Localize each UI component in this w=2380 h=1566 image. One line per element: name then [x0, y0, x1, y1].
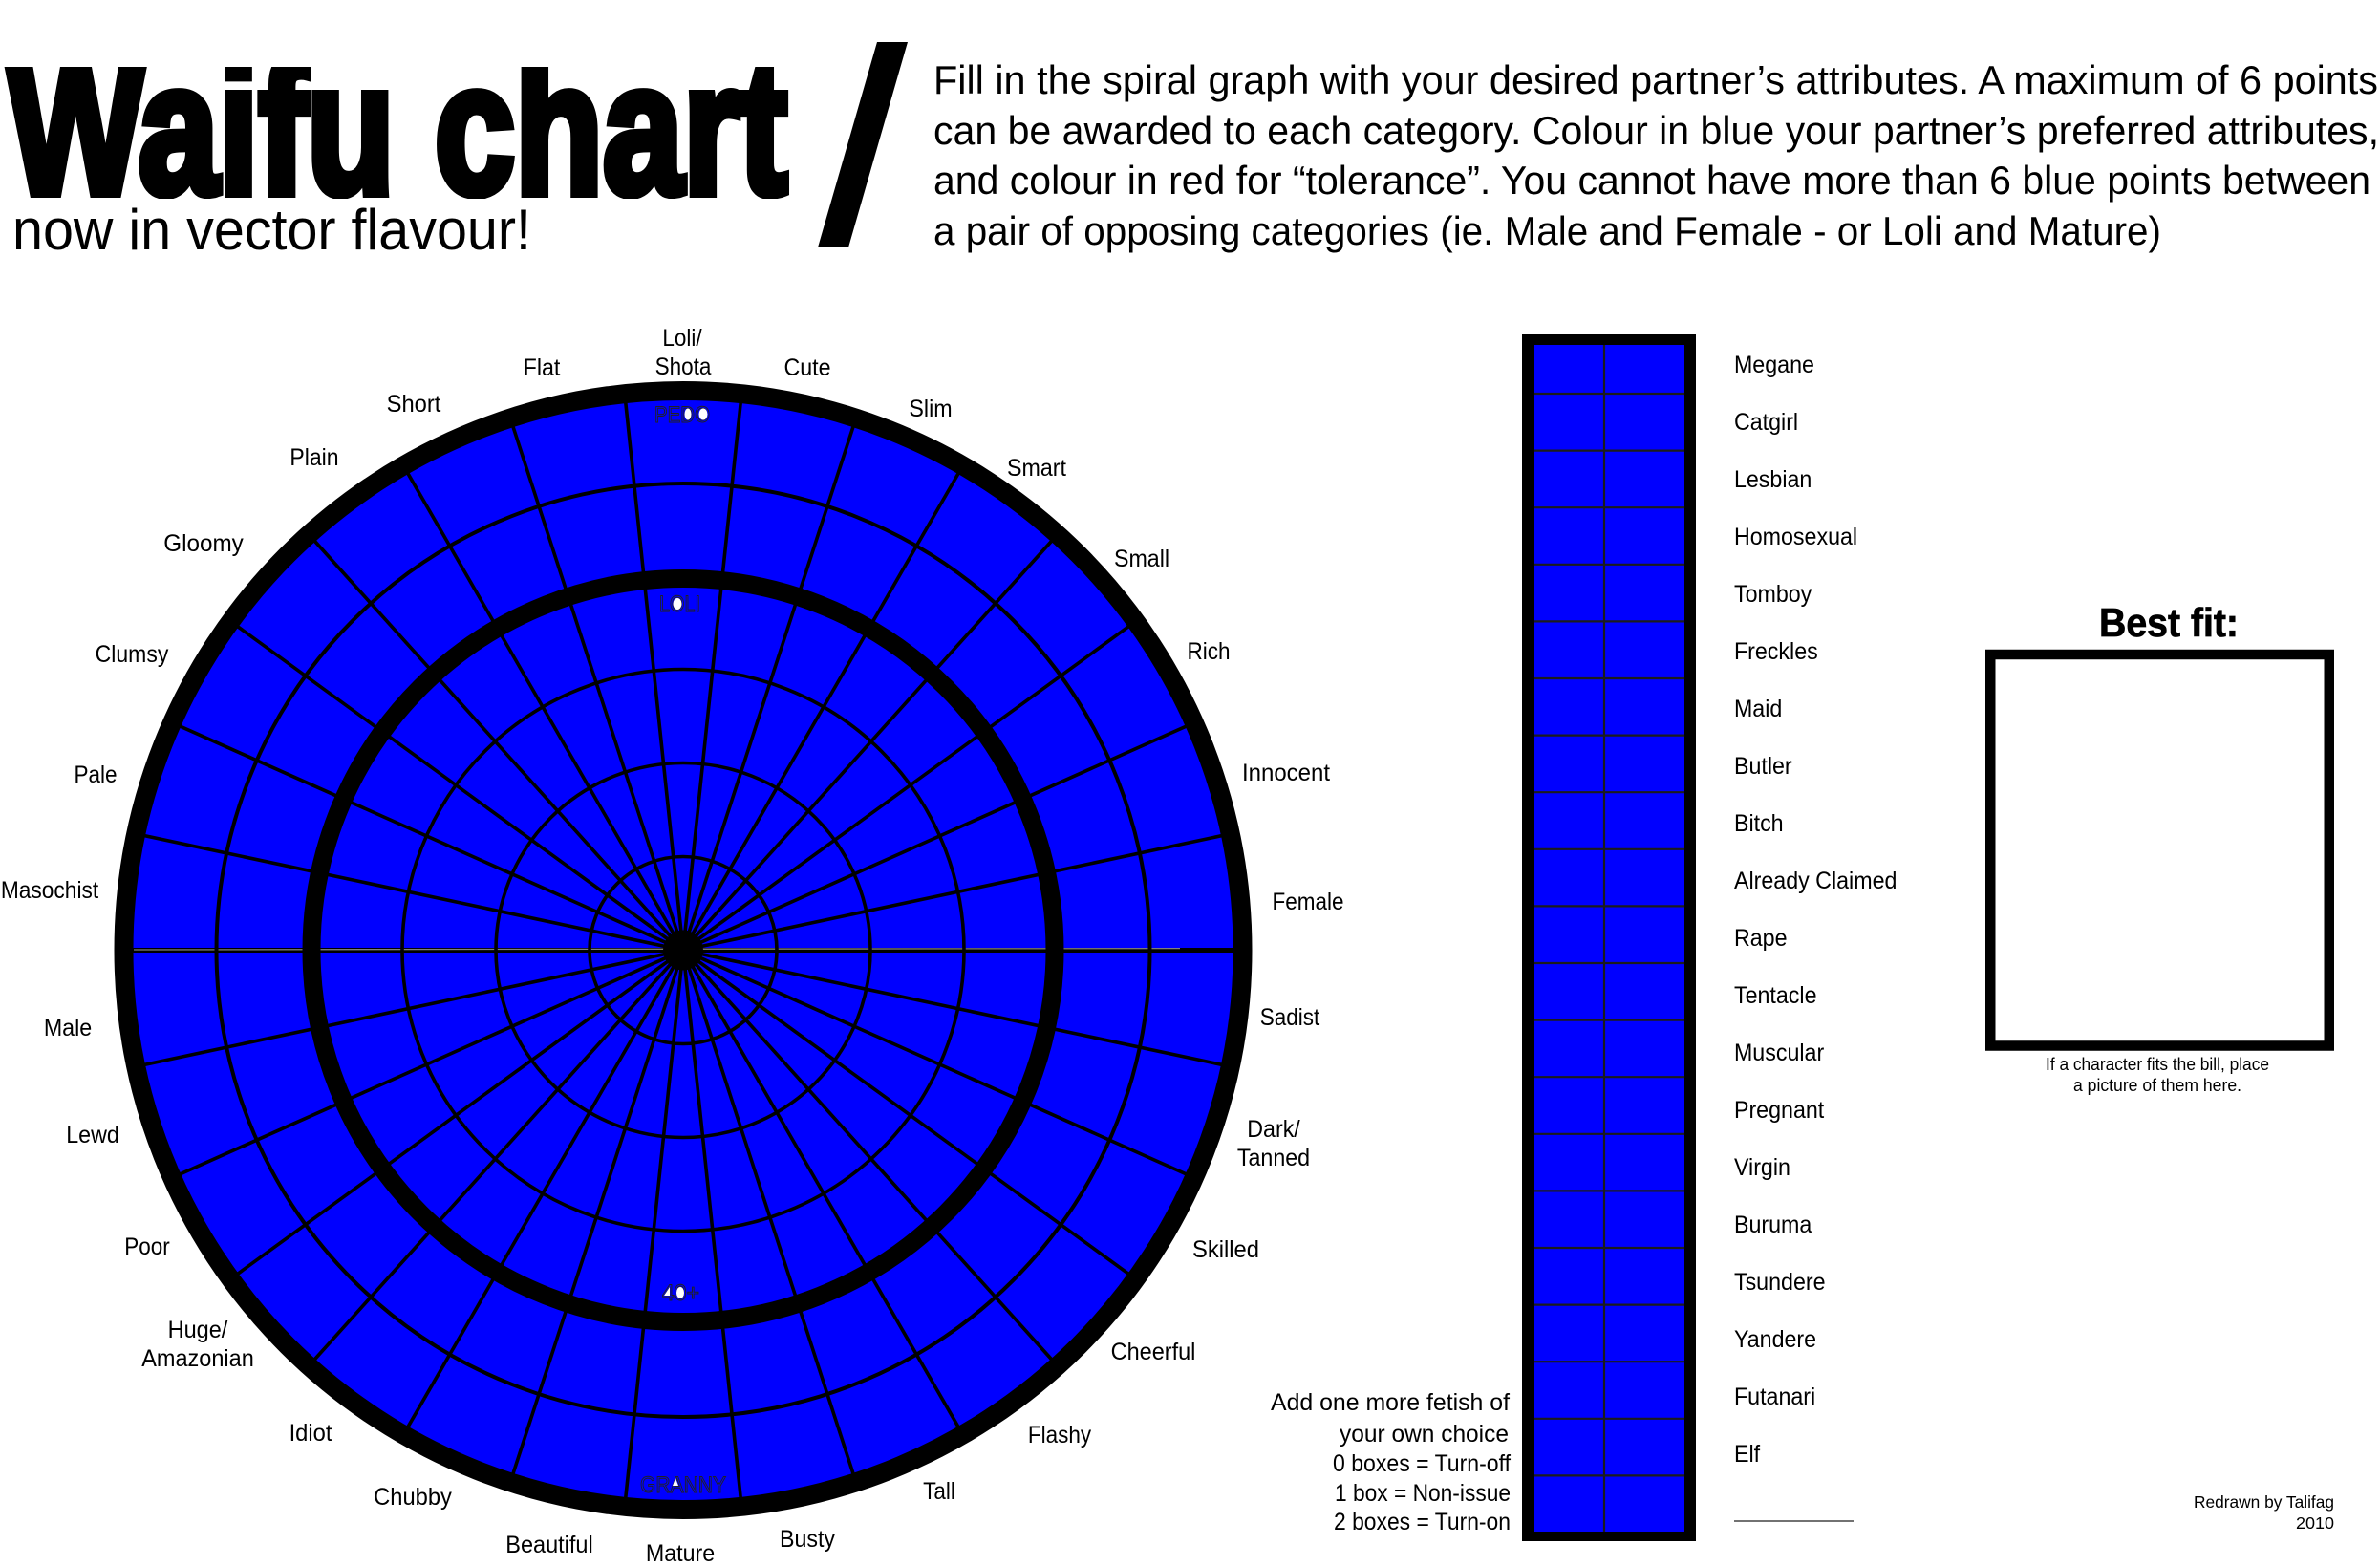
label: Rich: Rich — [1188, 638, 1230, 665]
instructions text block: a pair of opposing categories (ie. Male and Female - or Loli and Mature) — [933, 208, 2161, 253]
fetish label: Futanari: Futanari — [1734, 1384, 1815, 1410]
label: Cute: Cute — [783, 354, 831, 381]
label: Idiot: Idiot — [289, 1420, 332, 1447]
label: Huge/Amazonian — [141, 1317, 254, 1372]
label: Tall: Tall — [923, 1478, 955, 1505]
label: Busty: Busty — [780, 1526, 836, 1553]
scale word: GRANNY: GRANNY — [640, 1472, 726, 1498]
credit — [2194, 1492, 2334, 1533]
credit: Redrawn by Talifag — [2194, 1492, 2334, 1512]
fetish label: Muscular: Muscular — [1734, 1040, 1824, 1066]
label: Huge/Amazonian: Huge/ — [168, 1317, 228, 1343]
fetish label: Freckles: Freckles — [1734, 638, 1818, 665]
fetish label: Rape: Rape — [1734, 925, 1788, 952]
label: Poor: Poor — [124, 1233, 170, 1260]
label: Sadist: Sadist — [1260, 1004, 1320, 1031]
label: Masochist: Masochist — [1, 877, 99, 904]
label: Short: Short — [387, 391, 441, 418]
label: Cheerful: Cheerful — [1111, 1339, 1195, 1365]
label: Lewd: Lewd — [66, 1122, 119, 1148]
fetish label: Homosexual: Homosexual — [1734, 524, 1857, 550]
column blue cells — [1534, 345, 1684, 1532]
fetish label: Tomboy: Tomboy — [1734, 581, 1812, 608]
label: Loli/Shota — [655, 325, 712, 380]
label: Plain: Plain — [289, 444, 339, 471]
fetish label: Already Claimed: Already Claimed — [1734, 868, 1897, 894]
label: Flashy: Flashy — [1028, 1422, 1091, 1448]
label: Dark/Tanned: Tanned — [1237, 1145, 1310, 1171]
graph centre dot — [663, 931, 703, 971]
fetish label: Bitch: Bitch — [1734, 810, 1784, 837]
fetish label: Megane: Megane — [1734, 352, 1814, 378]
fetish label: Tentacle: Tentacle — [1734, 982, 1816, 1009]
label: Gloomy: Gloomy — [163, 531, 244, 557]
fetish label: Catgirl: Catgirl — [1734, 409, 1798, 436]
fetish instructions: Add one more fetish of — [1271, 1389, 1510, 1416]
label: Dark/Tanned: Dark/ — [1247, 1116, 1300, 1143]
graph spokes — [129, 399, 1237, 1501]
fetish instructions: your own choice — [1340, 1421, 1509, 1448]
fetish label: Elf: Elf — [1734, 1441, 1760, 1468]
fetish instructions: 0 boxes = Turn-off — [1333, 1450, 1511, 1477]
instructions text block — [933, 57, 2379, 253]
label: Huge/Amazonian: Amazonian — [141, 1345, 254, 1372]
best fit heading: Best fit: — [2099, 600, 2239, 645]
label: Pale: Pale — [74, 762, 118, 788]
label: Chubby: Chubby — [374, 1484, 453, 1511]
label: Small: Small — [1114, 546, 1169, 572]
fetish instructions: 1 box = Non-issue — [1335, 1480, 1511, 1507]
fetish label: Pregnant: Pregnant — [1734, 1097, 1825, 1124]
instructions text block: and colour in red for “tolerance”. You cannot have more than 6 blue points between — [933, 158, 2370, 203]
label: Skilled: Skilled — [1192, 1236, 1259, 1263]
instructions text block: can be awarded to each category. Colour in blue your partner’s preferred attributes, — [933, 108, 2379, 153]
graph rings — [124, 391, 1242, 1510]
fetish label: Buruma: Buruma — [1734, 1212, 1812, 1238]
label: Male: Male — [44, 1015, 92, 1041]
label: Clumsy: Clumsy — [96, 641, 168, 668]
label: Beautiful: Beautiful — [505, 1532, 593, 1558]
label: Slim: Slim — [909, 396, 953, 422]
fetish instructions: 2 boxes = Turn-on — [1334, 1509, 1511, 1535]
fetish tick-box column — [1522, 334, 1696, 1541]
blank write-in line — [1734, 1520, 1854, 1522]
credit: 2010 — [2296, 1513, 2334, 1533]
title: Waifu chart — [8, 25, 787, 233]
slash divider — [818, 42, 908, 247]
fetish label: Butler: Butler — [1734, 753, 1792, 780]
spiral graph — [123, 390, 1243, 1510]
best fit caption: If a character fits the bill, place — [2046, 1054, 2269, 1074]
label: Dark/Tanned — [1237, 1116, 1310, 1171]
label: Female: Female — [1273, 889, 1343, 915]
fetish label: Tsundere: Tsundere — [1734, 1269, 1826, 1296]
instructions text block: Fill in the spiral graph with your desired partner’s attributes. A maximum of 6 points — [933, 57, 2378, 102]
scale word: LOLI: LOLI — [659, 591, 700, 617]
fetish label: Maid: Maid — [1734, 696, 1782, 722]
best fit caption: a picture of them here. — [2073, 1075, 2241, 1095]
fetish instructions — [1271, 1389, 1511, 1535]
label: Loli/Shota: Shota — [655, 354, 712, 380]
label: Innocent: Innocent — [1242, 761, 1330, 786]
fetish label: Yandere: Yandere — [1734, 1326, 1816, 1353]
scale word: 40+: 40+ — [662, 1280, 699, 1306]
column frame — [1522, 334, 1696, 1541]
label: Flat: Flat — [524, 354, 561, 381]
label: Loli/Shota: Loli/ — [662, 325, 702, 352]
best fit caption — [2046, 1054, 2269, 1095]
label: Smart: Smart — [1007, 455, 1066, 482]
fetish label: Lesbian: Lesbian — [1734, 466, 1812, 493]
scale word: PEDO: PEDO — [654, 402, 710, 428]
column grid lines — [1534, 345, 1684, 1532]
graph blue fill — [123, 390, 1243, 1510]
best fit picture box — [1990, 654, 2329, 1045]
subtitle: now in vector flavour! — [12, 198, 531, 262]
fetish label: Virgin: Virgin — [1734, 1154, 1790, 1181]
